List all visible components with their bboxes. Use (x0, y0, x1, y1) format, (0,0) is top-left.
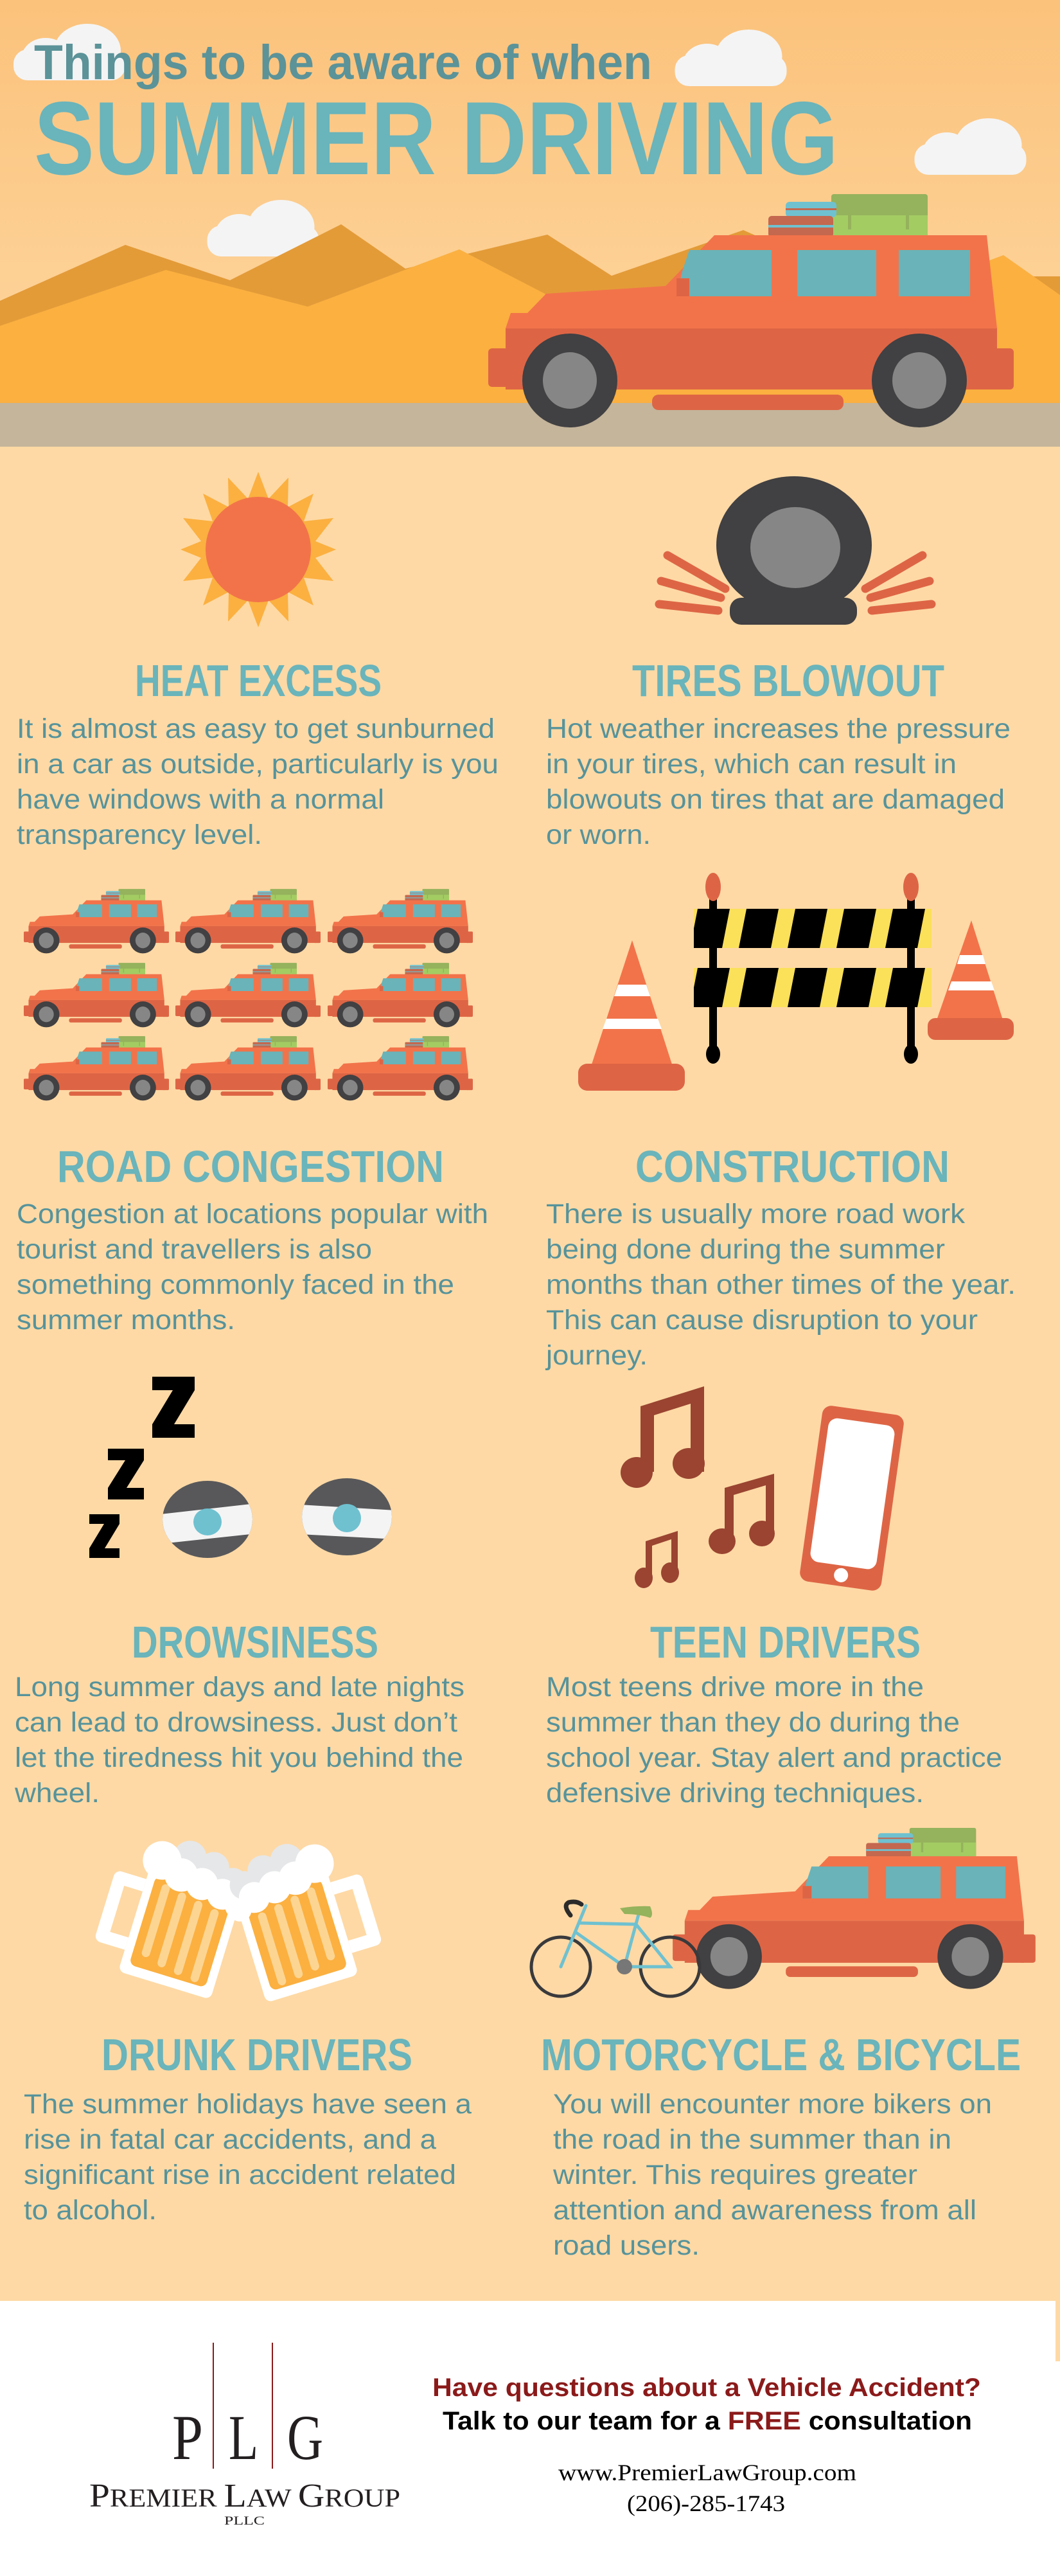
mountains (0, 224, 1060, 403)
road (0, 403, 1060, 447)
text block: journey. (545, 1340, 648, 1371)
call to action: Talk to our team for a FREE consultation (443, 2407, 972, 2435)
text block (24, 2089, 472, 2226)
icon: car grid (24, 889, 473, 1100)
icon: sun (181, 472, 336, 627)
title (34, 35, 838, 197)
heading: TEEN DRIVERS (650, 1617, 921, 1667)
logo: PREMIER LAW GROUP (89, 2478, 400, 2514)
title: Things to be aware of when (34, 35, 652, 90)
panel: drunk drivers (24, 1823, 472, 2226)
text block: let the tiredness hit you behind the (15, 1742, 463, 1773)
text block: Long summer days and late nights (15, 1672, 464, 1703)
heading: DRUNK DRIVERS (102, 2030, 412, 2080)
heading: DROWSINESS (132, 1617, 378, 1667)
heading: TIRES BLOWOUT (632, 656, 944, 706)
logo: G (287, 2402, 323, 2473)
logo (89, 2343, 400, 2528)
clouds (13, 24, 1027, 256)
panel: tires blowout (546, 476, 1011, 850)
text block: This can cause disruption to your (546, 1305, 978, 1336)
icon: beer mugs (94, 1823, 383, 2005)
text block: in your tires, which can result in (546, 749, 957, 780)
text block: summer months. (17, 1305, 235, 1336)
text block: the road in the summer than in (553, 2124, 951, 2155)
text block: attention and awareness from all (553, 2195, 976, 2226)
text block (546, 1672, 1002, 1809)
logo: L (229, 2402, 258, 2473)
panel: construction (545, 873, 1016, 1371)
logo: PLLC (224, 2514, 265, 2528)
icon: phone (799, 1404, 905, 1592)
text block: months than other times of the year. (546, 1269, 1016, 1300)
header car (488, 194, 1014, 427)
text block (545, 1199, 1016, 1371)
text block: There is usually more road work (546, 1199, 966, 1230)
icon: barrier (690, 873, 932, 1064)
text block: The summer holidays have seen a (24, 2089, 472, 2120)
call to action: www.PremierLawGroup.com (558, 2460, 856, 2485)
text block: something commonly faced in the (17, 1269, 454, 1300)
call to action: (206)-285-1743 (627, 2491, 785, 2516)
text block: transparency level. (17, 819, 262, 850)
logo: P (172, 2402, 203, 2473)
text block: in a car as outside, particularly is you (17, 749, 499, 780)
text block: to alcohol. (24, 2195, 157, 2226)
heading: HEAT EXCESS (135, 656, 382, 706)
icon: left cone (578, 940, 685, 1091)
text block (552, 2089, 992, 2261)
icon: car (673, 1828, 1036, 1989)
text block: blowouts on tires that are damaged (546, 784, 1005, 815)
heading: ROAD CONGESTION (57, 1141, 444, 1192)
call to action (432, 2374, 981, 2516)
panel: road congestion (17, 889, 488, 1336)
panel: drowsiness (14, 1377, 464, 1809)
text block: or worn. (546, 819, 651, 850)
footer (0, 2301, 1060, 2576)
text block: have windows with a normal (17, 784, 384, 815)
heading: CONSTRUCTION (635, 1141, 950, 1192)
panel: teen drivers (546, 1386, 1002, 1809)
text block (14, 1672, 464, 1809)
text block: summer than they do during the (546, 1707, 960, 1738)
icon: sleepy eyes (161, 1476, 396, 1562)
icon: music notes (621, 1386, 775, 1588)
text block: defensive driving techniques. (546, 1778, 924, 1809)
text block: You will encounter more bikers on (553, 2089, 992, 2120)
text block: It is almost as easy to get sunburned (17, 713, 495, 744)
text block (17, 713, 499, 850)
text block: rise in fatal car accidents, and a (24, 2124, 436, 2155)
text block: Congestion at locations popular with (17, 1199, 488, 1230)
icon: right cone (928, 920, 1014, 1040)
text block: Most teens drive more in the (546, 1672, 924, 1703)
text block: road users. (553, 2230, 700, 2261)
title: SUMMER DRIVING (34, 80, 838, 197)
icon: bicycle (531, 1902, 700, 1996)
text block: Hot weather increases the pressure (546, 713, 1011, 744)
header scene (0, 0, 1060, 450)
call to action: Have questions about a Vehicle Accident? (432, 2374, 981, 2402)
text block: significant rise in accident related (24, 2160, 456, 2190)
text block: wheel. (14, 1778, 100, 1809)
icon: zzz (89, 1377, 195, 1558)
icon: tire (659, 476, 932, 625)
text block: being done during the summer (546, 1234, 945, 1265)
text block: school year. Stay alert and practice (546, 1742, 1002, 1773)
text block (546, 713, 1011, 850)
text block (17, 1199, 488, 1336)
text block: tourist and travellers is also (17, 1234, 372, 1265)
text block: winter. This requires greater (552, 2160, 917, 2190)
text block: can lead to drowsiness. Just don’t (15, 1707, 457, 1738)
panel: motorcycle & bicycle (531, 1828, 1036, 2261)
panel: heat excess (17, 472, 499, 850)
